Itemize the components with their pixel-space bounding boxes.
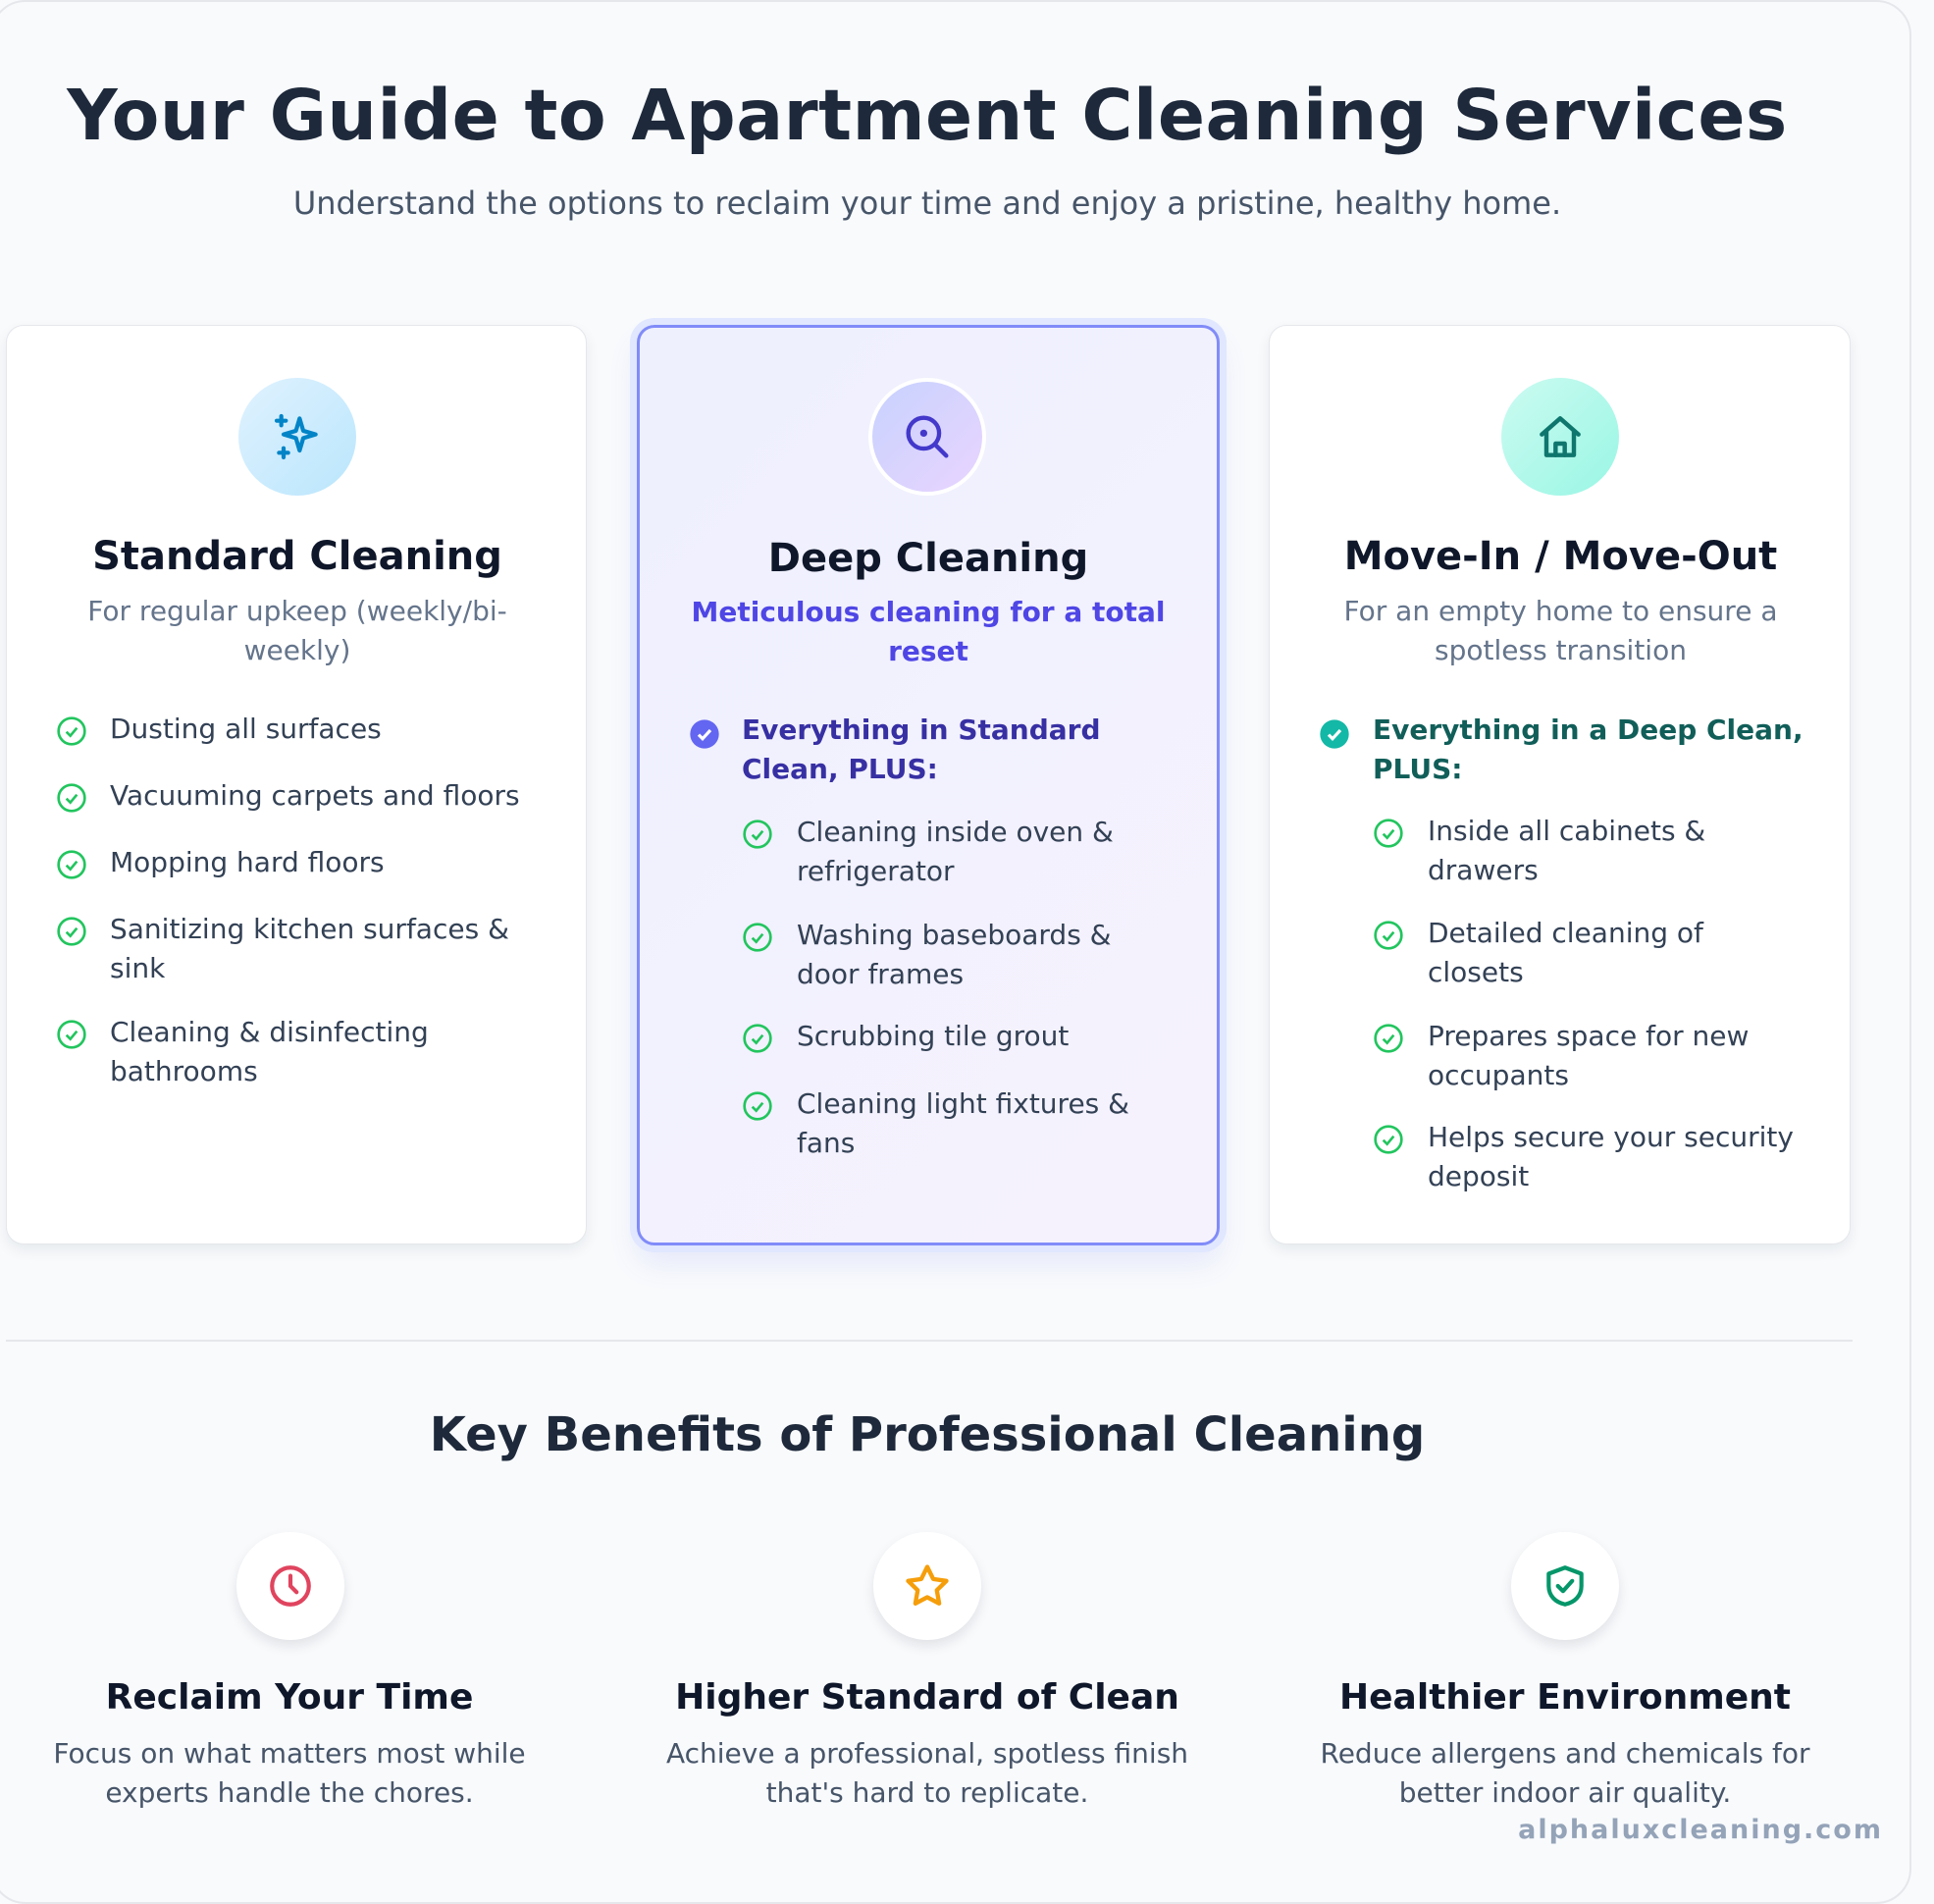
checklist: PLUS: bbox=[1373, 753, 1462, 785]
title: Healthier Environment bbox=[1339, 1677, 1791, 1718]
checklist: Everything in a Deep Clean, bbox=[1373, 714, 1803, 746]
subheading: weekly) bbox=[244, 634, 350, 666]
footer: website: alphaluxcleaning.com bbox=[1518, 1815, 1883, 1845]
icon: magnifier bbox=[868, 378, 986, 496]
checklist: Clean, PLUS: bbox=[742, 753, 938, 785]
checklist: bathrooms bbox=[110, 1055, 258, 1087]
checklist: drawers bbox=[1428, 854, 1539, 886]
checklist: Dusting all surfaces bbox=[110, 713, 382, 745]
benefit: higher standard bbox=[666, 1564, 1188, 1809]
checklist: door frames bbox=[797, 958, 964, 990]
benefit: healthier environment bbox=[1321, 1565, 1809, 1809]
heading: standard cleaning: Standard Cleaning bbox=[92, 534, 502, 579]
benefit: reclaim your time bbox=[53, 1565, 526, 1809]
icon: star bbox=[873, 1532, 981, 1640]
checklist: Detailed cleaning of bbox=[1428, 917, 1703, 949]
checklist: Washing baseboards & bbox=[797, 919, 1112, 951]
checklist: deposit bbox=[1428, 1160, 1529, 1192]
title: Your Guide to Apartment Cleaning Services bbox=[67, 75, 1788, 156]
checklist: Scrubbing tile grout bbox=[797, 1020, 1069, 1052]
checklist: Mopping hard floors bbox=[110, 846, 385, 878]
description: that's hard to replicate. bbox=[766, 1776, 1088, 1809]
description: Focus on what matters most while bbox=[53, 1737, 526, 1770]
panel: move-in move-out bbox=[1269, 325, 1851, 1244]
subheading bbox=[691, 596, 1166, 667]
description bbox=[666, 1737, 1188, 1809]
checklist: Cleaning inside oven & bbox=[797, 816, 1114, 848]
icon: clock bbox=[236, 1532, 344, 1640]
checklist: Everything in Standard bbox=[742, 714, 1101, 746]
subheading: For an empty home to ensure a bbox=[1344, 595, 1777, 627]
checklist: Cleaning & disinfecting bbox=[110, 1016, 429, 1048]
description: better indoor air quality. bbox=[1399, 1776, 1731, 1809]
subheading: reset bbox=[888, 635, 968, 667]
subheading bbox=[87, 595, 507, 666]
checklist: refrigerator bbox=[797, 855, 955, 887]
subheading: For regular upkeep (weekly/bi- bbox=[87, 595, 507, 627]
checklist bbox=[1320, 714, 1803, 1192]
checklist: Inside all cabinets & bbox=[1428, 815, 1705, 847]
checklist: occupants bbox=[1428, 1059, 1569, 1091]
checklist: sink bbox=[110, 952, 165, 984]
heading: move-in move-out: Move-In / Move-Out bbox=[1344, 534, 1777, 579]
subheading: Meticulous cleaning for a total bbox=[691, 596, 1166, 628]
subheading: spotless transition bbox=[1435, 634, 1687, 666]
title: Reclaim Your Time bbox=[106, 1677, 473, 1718]
checklist: Prepares space for new bbox=[1428, 1020, 1749, 1052]
description: Achieve a professional, spotless finish bbox=[666, 1737, 1188, 1770]
heading: deep cleaning: Deep Cleaning bbox=[768, 536, 1088, 581]
checklist: Sanitizing kitchen surfaces & bbox=[110, 913, 509, 945]
subheading bbox=[1344, 595, 1777, 666]
checklist bbox=[690, 714, 1129, 1159]
description bbox=[1321, 1737, 1809, 1809]
panel: standard cleaning bbox=[6, 325, 587, 1244]
subtitle: Understand the options to reclaim your time and enjoy a pristine, healthy home. bbox=[293, 185, 1561, 222]
heading: key benefits: Key Benefits of Professional Cleaning bbox=[430, 1407, 1425, 1462]
description: experts handle the chores. bbox=[105, 1776, 474, 1809]
checklist: Vacuuming carpets and floors bbox=[110, 779, 520, 812]
checklist: closets bbox=[1428, 956, 1524, 988]
title: Higher Standard of Clean bbox=[675, 1677, 1179, 1718]
icon: sparkle bbox=[238, 378, 356, 496]
description: Reduce allergens and chemicals for bbox=[1321, 1737, 1809, 1770]
checklist: Cleaning light fixtures & bbox=[797, 1087, 1129, 1120]
checklist: Helps secure your security bbox=[1428, 1121, 1794, 1153]
panel: deep cleaning bbox=[637, 325, 1220, 1245]
checklist: fans bbox=[797, 1127, 855, 1159]
description bbox=[53, 1737, 526, 1809]
checklist bbox=[57, 713, 520, 1087]
icon: house bbox=[1501, 378, 1619, 496]
icon: shield bbox=[1511, 1532, 1619, 1640]
